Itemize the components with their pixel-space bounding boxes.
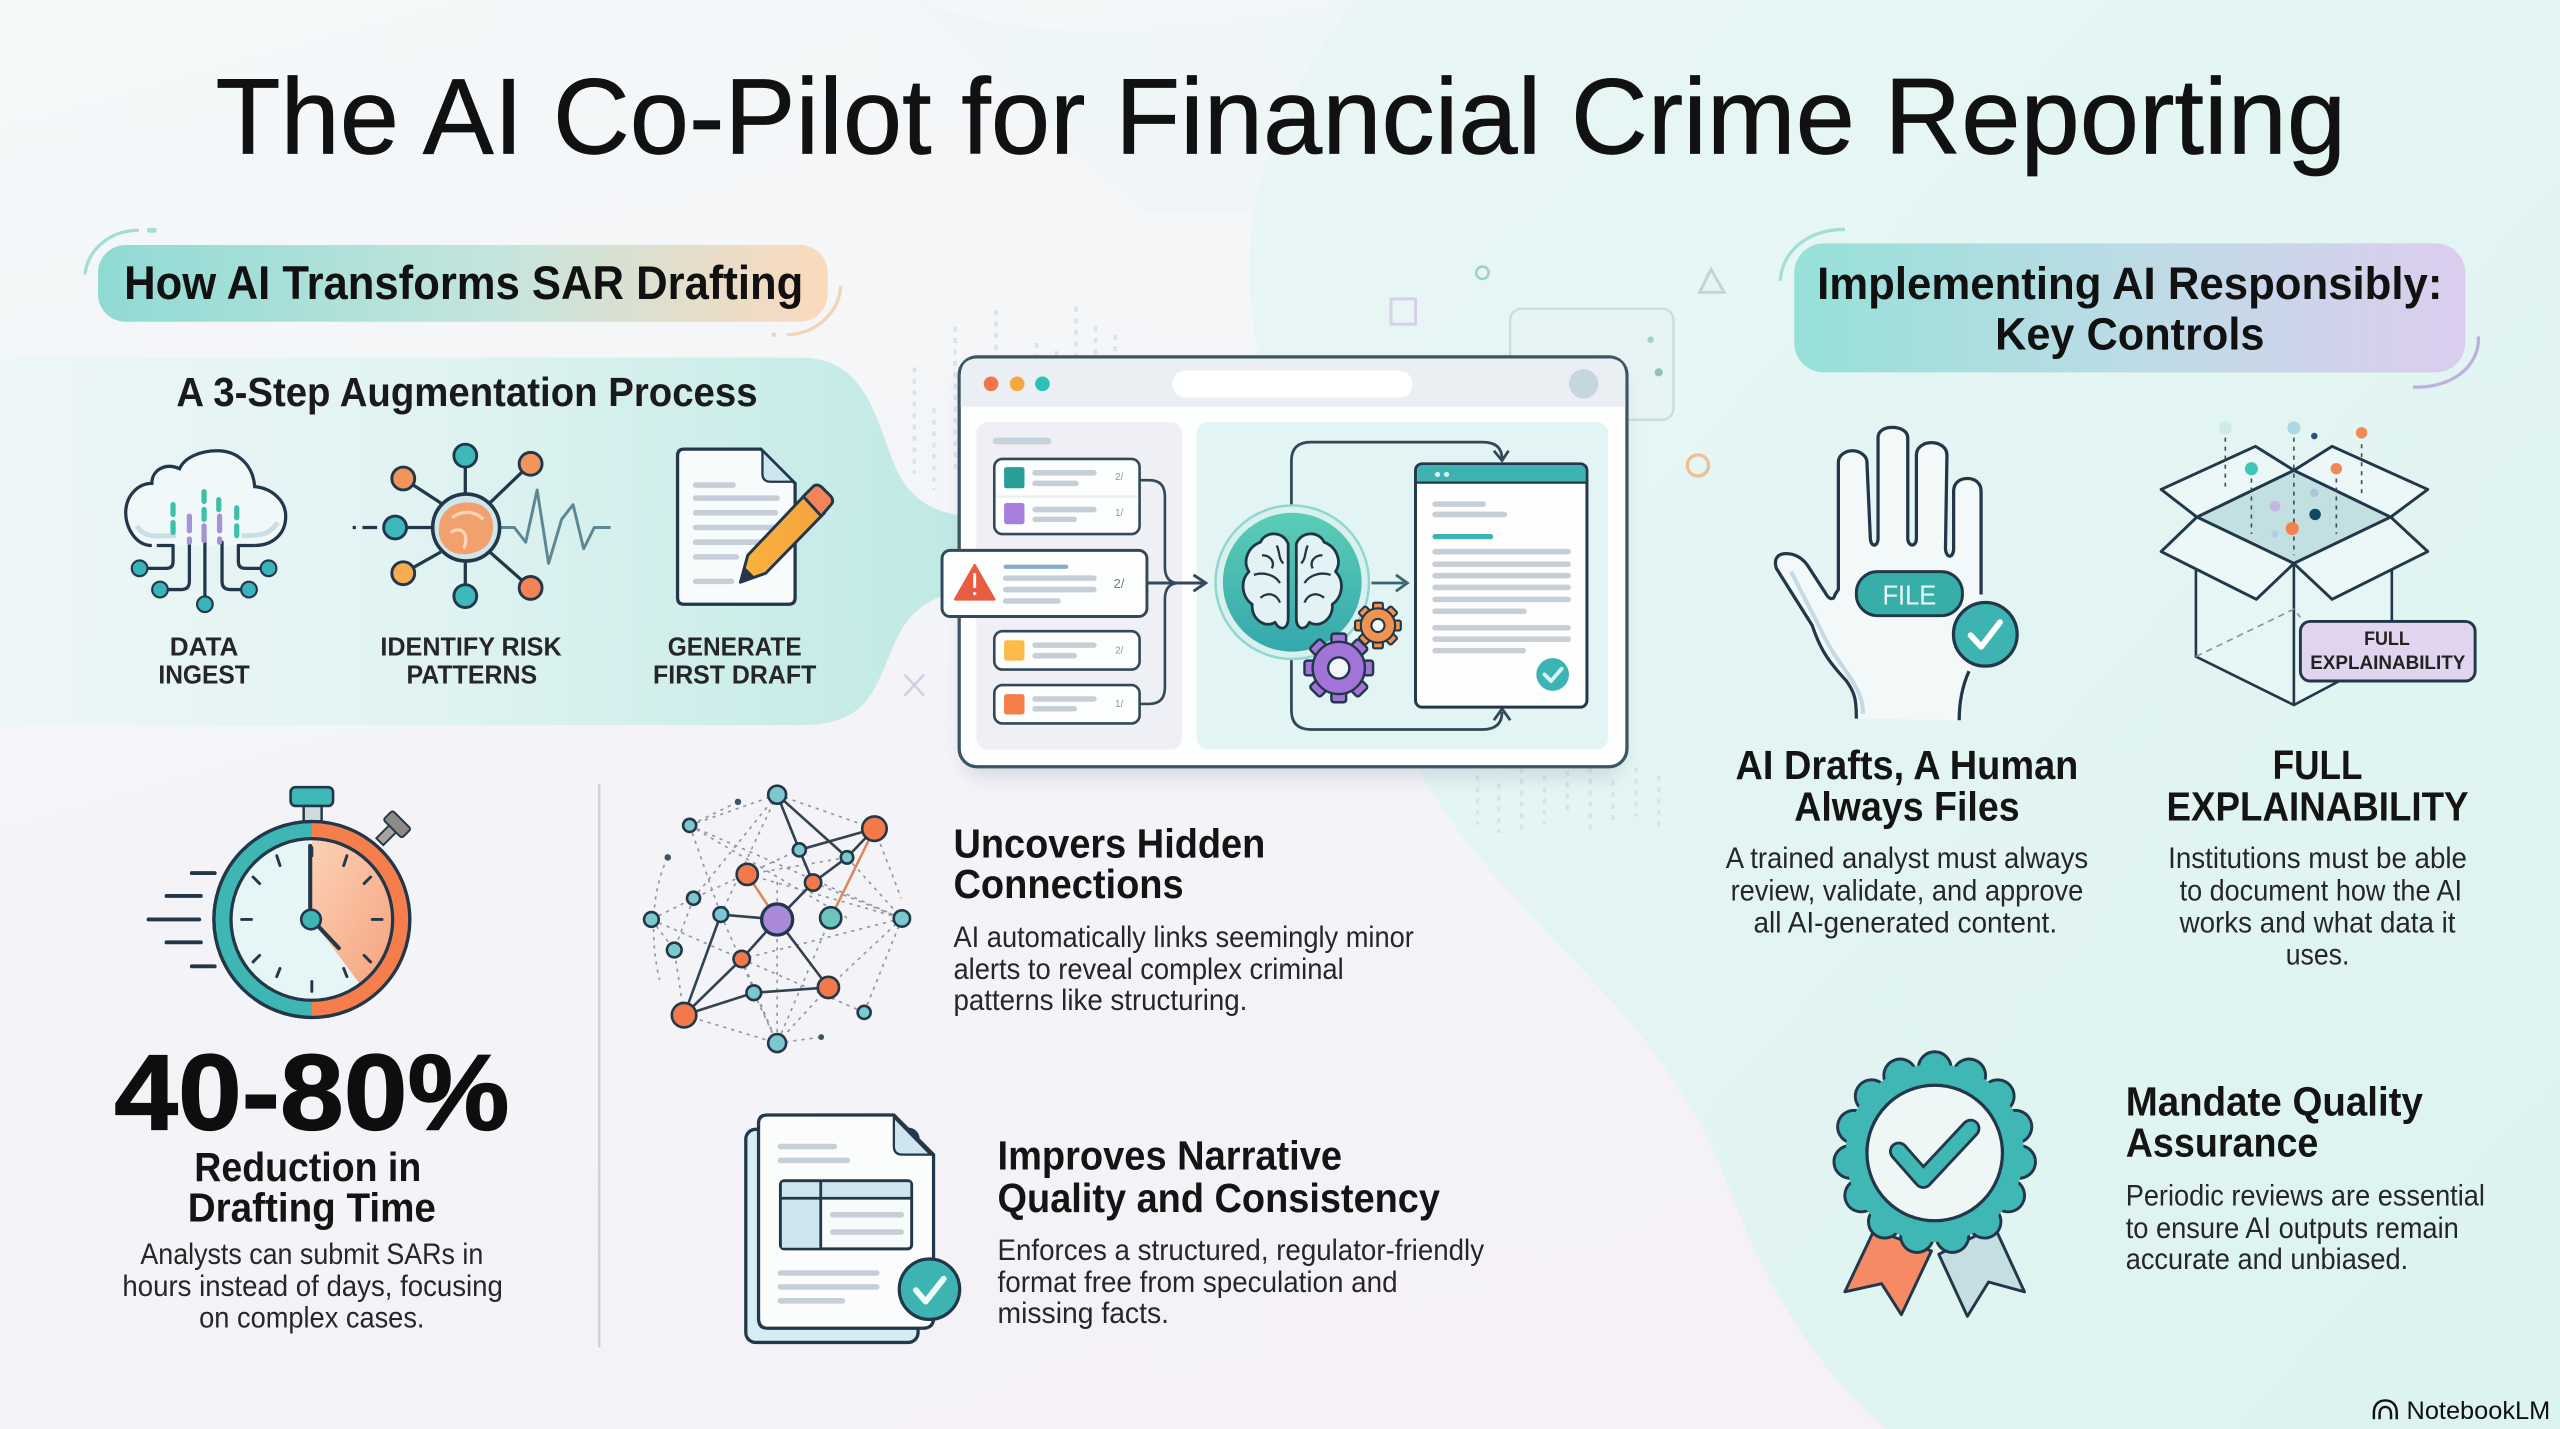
panel: mandate quality assurance	[1832, 1052, 2485, 1316]
heading: responsible AI	[1817, 258, 2442, 359]
label: data ingest: INGEST	[158, 659, 250, 689]
text: uncovers description: alerts to reveal complex criminal	[953, 953, 1344, 986]
panel: application window	[942, 357, 1627, 777]
text: uncovers description: patterns like structuring.	[953, 984, 1247, 1017]
heading: AI drafts: Always Files	[1794, 784, 2020, 830]
icon: gears	[1304, 603, 1401, 702]
alert cards: 2/	[1115, 472, 1124, 483]
panel: 3-step process	[0, 358, 967, 725]
decorative shapes	[904, 267, 1724, 696]
text: quality assurance description: to ensure AI outputs remain	[2126, 1212, 2459, 1245]
icon: open transparent box: EXPLAINABILITY	[2310, 652, 2465, 674]
text: uncovers description: AI automatically links seemingly minor	[953, 921, 1414, 954]
heading: AI drafts	[1736, 742, 2078, 830]
text: narrative description: format free from speculation and	[998, 1266, 1398, 1299]
text: AI drafts description: review, validate, and approve	[1731, 875, 2083, 908]
alert cards: 1/	[1115, 699, 1124, 710]
heading: uncovers hidden connections: Uncovers Hidden	[953, 820, 1265, 866]
panel: drafting time stat	[114, 787, 509, 1335]
text: explainability description	[2168, 842, 2467, 971]
alert card highlighted	[942, 550, 1147, 617]
icon: identify risk patterns	[353, 444, 611, 608]
panel: full explainability	[2161, 421, 2475, 971]
gear: purple	[1304, 634, 1373, 702]
heading: mandate quality assurance	[2126, 1078, 2423, 1165]
text: uncovers description	[953, 921, 1414, 1017]
icon: hand with file button: FILE	[1882, 579, 1936, 610]
panel: alerts list	[976, 422, 1182, 750]
decorative data rain	[914, 307, 1659, 833]
alert card highlighted: 2/	[1113, 576, 1125, 591]
stat heading: Drafting Time	[188, 1185, 436, 1231]
heading: responsible AI: Key Controls	[1995, 308, 2264, 359]
stat heading: Reduction in	[194, 1144, 421, 1190]
icon: network graph	[644, 786, 910, 1052]
text: narrative description: missing facts.	[998, 1297, 1169, 1330]
stat description	[122, 1238, 503, 1335]
icon: stopwatch	[149, 787, 411, 1017]
text: quality assurance description	[2126, 1179, 2485, 1276]
text: explainability description: Institutions must be able	[2168, 842, 2467, 875]
heading: how AI transforms: How AI Transforms SAR Drafting	[124, 257, 803, 310]
text: AI drafts description: A trained analyst must always	[1726, 842, 2088, 875]
panel: AI drafts, a human always files	[1726, 427, 2088, 940]
label: data ingest	[158, 632, 250, 689]
panel: AI workspace	[1197, 422, 1608, 750]
title: The AI Co-Pilot for Financial Crime Reporting	[216, 56, 2346, 177]
label: identify risk patterns	[380, 632, 562, 689]
stat description: on complex cases.	[199, 1302, 424, 1335]
alert cards: 2/	[1115, 645, 1124, 656]
icon: quality rosette	[1832, 1052, 2037, 1316]
big number: 40-80%	[114, 1031, 509, 1152]
text: narrative description: Enforces a structured, regulator-friendly	[998, 1234, 1484, 1267]
panel: improves narrative quality	[746, 1115, 1484, 1342]
panel: uncovers hidden connections	[644, 786, 1414, 1052]
text: explainability description: uses.	[2286, 938, 2349, 971]
text: explainability description: to document how the AI	[2180, 875, 2462, 908]
label: identify risk patterns: PATTERNS	[407, 659, 537, 689]
arrow: alerts to AI	[1148, 575, 1206, 591]
icon: cloud data ingest	[126, 451, 286, 612]
label: generate first draft: FIRST DRAFT	[653, 659, 816, 689]
label: data ingest: DATA	[170, 632, 239, 662]
watermark: NotebookLM: NotebookLM	[2407, 1397, 2550, 1425]
text: AI drafts description: all AI-generated content.	[1753, 907, 2057, 940]
text: narrative description	[998, 1234, 1484, 1330]
heading: uncovers hidden connections	[953, 820, 1265, 907]
gear: orange	[1355, 603, 1401, 648]
alert cards	[994, 459, 1140, 723]
text: AI drafts description	[1726, 842, 2088, 940]
heading: full explainability: EXPLAINABILITY	[2167, 784, 2469, 830]
alert cards: 1/	[1115, 508, 1124, 519]
arrows	[1291, 442, 1502, 730]
connector lines	[1140, 480, 1179, 704]
stat description: hours instead of days, focusing	[122, 1270, 503, 1303]
icon: draft document	[1416, 464, 1587, 707]
text: quality assurance description: Periodic reviews are essential	[2126, 1179, 2485, 1212]
heading: mandate quality assurance: Mandate Quality	[2126, 1078, 2423, 1124]
label: generate first draft	[653, 632, 816, 689]
heading: 3-step process: A 3-Step Augmentation Process	[176, 369, 758, 415]
stat description: Analysts can submit SARs in	[140, 1238, 483, 1271]
panel: how AI transforms header	[85, 228, 841, 337]
text: quality assurance description: accurate and unbiased.	[2126, 1243, 2408, 1276]
heading: responsible AI: Implementing AI Responsibly:	[1817, 258, 2442, 309]
label: identify risk patterns: IDENTIFY RISK	[380, 632, 562, 662]
icon: open transparent box: FULL	[2364, 628, 2410, 650]
icon: AI brain	[1216, 505, 1369, 659]
heading: full explainability: FULL	[2273, 742, 2362, 788]
heading: improves narrative quality: Improves Narrative	[998, 1132, 1342, 1178]
label: generate first draft: GENERATE	[668, 632, 802, 662]
heading: AI drafts: AI Drafts, A Human	[1736, 742, 2078, 788]
icon: structured document	[746, 1115, 960, 1342]
text: explainability description: works and what data it	[2179, 907, 2456, 940]
icon: generate first draft	[678, 449, 833, 604]
heading: mandate quality assurance: Assurance	[2126, 1119, 2318, 1165]
panel: responsible AI header	[1780, 229, 2478, 387]
heading: full explainability	[2167, 742, 2469, 830]
icon: open transparent box	[2161, 421, 2475, 705]
heading: improves narrative quality	[998, 1132, 1440, 1221]
stat heading	[188, 1144, 436, 1231]
heading: improves narrative quality: Quality and Consistency	[998, 1175, 1440, 1221]
heading: uncovers hidden connections: Connections	[953, 861, 1184, 907]
icon: hand with file button	[1775, 427, 2017, 720]
